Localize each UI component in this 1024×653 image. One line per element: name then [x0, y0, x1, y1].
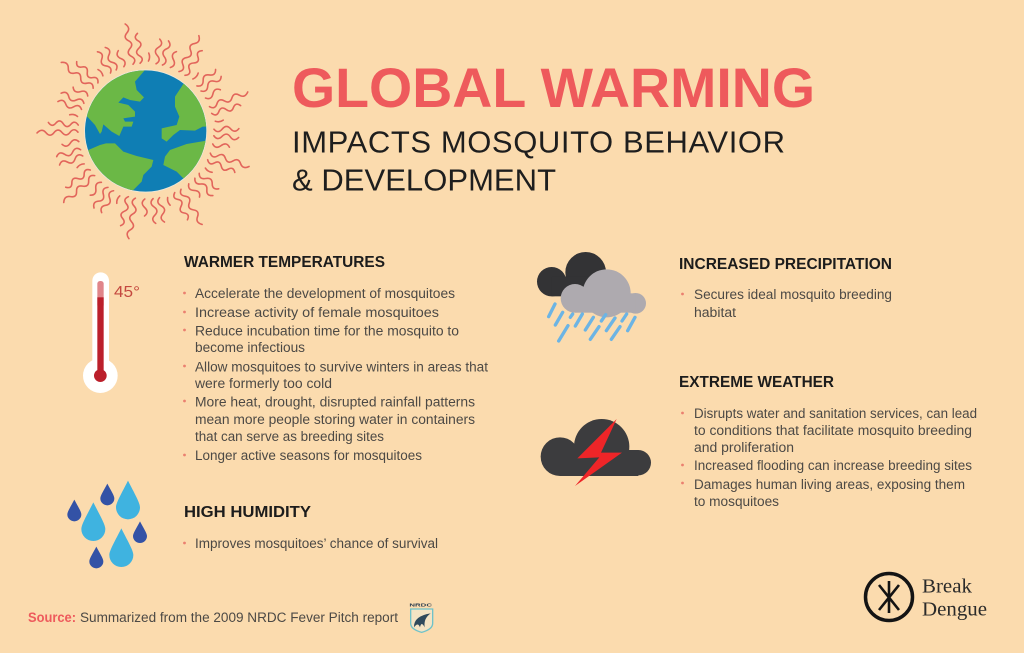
section: increased precipitation [679, 256, 892, 320]
bullet list: mean more people storing water in containers [195, 412, 475, 427]
icon: NRDC logo: NRDC [409, 603, 433, 609]
heading: global warming: GLOBAL WARMING [292, 57, 815, 119]
bullet list: become infectious [195, 340, 305, 355]
title [292, 57, 815, 198]
wordmark: Break [922, 576, 972, 598]
bullet: Improves mosquitoes’ chance of survival [195, 536, 438, 551]
sun heat rays [33, 15, 265, 249]
bullet list: Reduce incubation time for the mosquito to [195, 324, 459, 338]
source line: Summarized from the 2009 NRDC Fever Pitch report [80, 610, 398, 625]
bullet list: and proliferation [694, 440, 794, 455]
icon: storm cloud with lightning [541, 419, 651, 486]
bullet list: that can serve as breeding sites [195, 429, 384, 444]
lightning bolt [575, 419, 622, 486]
bullet [681, 287, 892, 320]
bullet: habitat [694, 305, 736, 320]
subtitle line 1: IMPACTS MOSQUITO BEHAVIOR [292, 124, 785, 160]
heading: HIGH HUMIDITY [184, 504, 312, 521]
logo: Break Dengue [866, 574, 987, 620]
bullet list: Increase activity of female mosquitoes [195, 305, 439, 320]
bullet list: Disrupts water and sanitation services, can lead [694, 406, 977, 421]
bullet list: were formerly too cold [194, 376, 332, 391]
wordmark: Dengue [922, 598, 987, 620]
icon: thermometer [83, 272, 140, 393]
bullet: Secures ideal mosquito breeding [694, 287, 892, 302]
bullet list [681, 406, 977, 509]
bullet list: Longer active seasons for mosquitoes [195, 448, 422, 463]
heading: INCREASED PRECIPITATION [679, 256, 892, 273]
logo mark [866, 574, 912, 620]
bullet list: Increased flooding can increase breeding sites [694, 458, 972, 473]
icon: thermometer: 45° [114, 284, 140, 301]
heading: WARMER TEMPERATURES [184, 254, 385, 271]
icon: sun rays and earth [36, 23, 250, 240]
bullet list: to mosquitoes [694, 494, 779, 509]
icon: rain clouds [537, 252, 646, 341]
source line: Source: [28, 609, 76, 625]
bullet list: Accelerate the development of mosquitoes [195, 286, 455, 301]
bullet list: Allow mosquitoes to survive winters in areas that [195, 360, 488, 374]
section: warmer temperatures [183, 254, 488, 463]
bullet list [183, 286, 488, 463]
heading: EXTREME WEATHER [679, 374, 834, 391]
bullet list: Damages human living areas, exposing them [694, 477, 965, 492]
bullet list: to conditions that facilitate mosquito breeding [694, 423, 972, 438]
section: extreme weather [679, 374, 977, 509]
subtitle line 2: & DEVELOPMENT [292, 162, 556, 198]
section: high humidity [183, 504, 438, 551]
icon: NRDC logo [409, 603, 433, 632]
wordmark [922, 576, 987, 620]
earth globe [84, 70, 208, 192]
icon: water drops [67, 481, 147, 568]
bullet list: More heat, drought, disrupted rainfall patterns [195, 394, 475, 410]
